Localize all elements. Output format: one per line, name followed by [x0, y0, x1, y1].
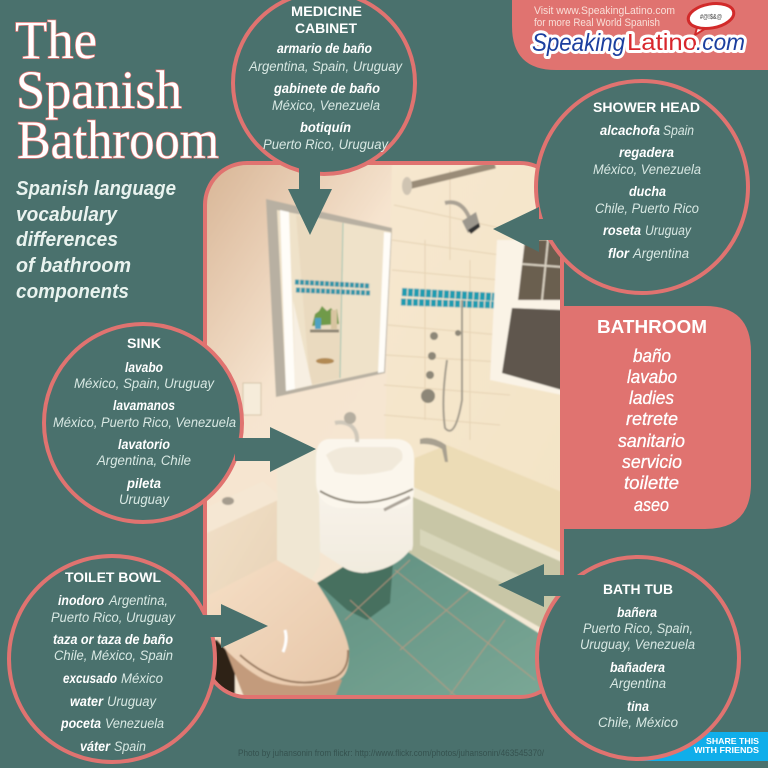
- circle: medicine cabinet: [233, 0, 415, 174]
- title: [15, 10, 219, 170]
- share banner: [640, 732, 768, 761]
- terms: shower head: México, Venezuela: [593, 162, 701, 177]
- word list: bathroom terms: retrete: [626, 408, 678, 429]
- circle: shower head: [536, 81, 748, 293]
- subtitle: differences: [16, 229, 118, 251]
- terms: bath tub: Puerto Rico, Spain,: [583, 621, 693, 636]
- promo text: for more Real World Spanish: [534, 17, 660, 29]
- heading: medicine cabinet: [291, 4, 362, 36]
- subtitle: of bathroom: [16, 255, 131, 277]
- share text: [694, 736, 759, 755]
- terms: bath tub: bañadera: [610, 660, 665, 675]
- title: Bathroom: [17, 110, 219, 170]
- circle: bath tub: [537, 557, 739, 759]
- word list: bathroom terms: ladies: [629, 387, 674, 408]
- terms: toilet bowl: [51, 593, 176, 754]
- terms: sink: México, Spain, Uruguay: [74, 376, 215, 391]
- share text: SHARE THIS: [706, 736, 759, 746]
- word list: bathroom terms: baño: [633, 345, 671, 366]
- terms: shower head: alcachofa: [600, 123, 660, 138]
- panel: sink: [44, 324, 316, 522]
- panel: shower head: [493, 81, 748, 293]
- title: Spanish: [16, 60, 182, 120]
- subtitle: Spanish language: [16, 178, 176, 200]
- terms: medicine cabinet: gabinete de baño: [273, 81, 380, 96]
- terms: toilet bowl: váter: [80, 739, 111, 754]
- promo text: Visit www.SpeakingLatino.com: [534, 5, 675, 17]
- terms: medicine cabinet: Puerto Rico, Uruguay: [263, 137, 389, 152]
- logo: SpeakingLatino.com: [532, 0, 745, 57]
- terms: toilet bowl: Argentina,: [108, 593, 168, 608]
- heading: bath tub: BATH TUB: [603, 582, 673, 597]
- heading: bathroom: BATHROOM: [597, 317, 707, 337]
- heading: toilet bowl: TOILET BOWL: [65, 570, 161, 585]
- word list: bathroom terms: lavabo: [627, 366, 677, 387]
- terms: bath tub: Chile, México: [598, 715, 678, 730]
- subtitle: components: [16, 281, 129, 303]
- title: The: [15, 10, 97, 70]
- logo: SpeakingLatino.com: #@!$&@: [700, 14, 722, 21]
- terms: bath tub: Argentina: [609, 676, 666, 691]
- circle: sink: [44, 324, 242, 522]
- terms: toilet bowl: excusado: [63, 671, 117, 686]
- terms: toilet bowl: Puerto Rico, Uruguay: [51, 610, 176, 625]
- terms: toilet bowl: Venezuela: [105, 716, 164, 731]
- heading: sink: SINK: [127, 336, 161, 351]
- heading: shower head: SHOWER HEAD: [593, 100, 700, 115]
- terms: toilet bowl: taza or taza de baño: [53, 632, 173, 647]
- terms: toilet bowl: water: [70, 694, 104, 709]
- terms: bath tub: Uruguay, Venezuela: [580, 637, 695, 652]
- arrow: to sink: [235, 427, 316, 472]
- terms: sink: Argentina, Chile: [96, 453, 191, 468]
- terms: sink: Uruguay: [119, 492, 170, 507]
- terms: medicine cabinet: armario de baño: [277, 41, 372, 56]
- arrow: to medicine cabinet: [288, 165, 332, 235]
- terms: shower head: Uruguay: [645, 223, 692, 238]
- subtitle: [16, 178, 176, 303]
- terms: shower head: Spain: [663, 123, 694, 138]
- word list: bathroom terms: aseo: [634, 494, 669, 515]
- panel: toilet bowl: [9, 556, 268, 762]
- terms: sink: lavatorio: [118, 437, 170, 452]
- arrow: to bath tub: [498, 564, 585, 607]
- terms: toilet bowl: Spain: [114, 739, 146, 754]
- terms: shower head: Argentina: [632, 246, 689, 261]
- terms: sink: México, Puerto Rico, Venezuela: [53, 415, 236, 430]
- terms: shower head: regadera: [619, 145, 674, 160]
- logo: SpeakingLatino.com: Latino: [627, 29, 697, 55]
- terms: toilet bowl: Chile, México, Spain: [54, 648, 173, 663]
- terms: medicine cabinet: México, Venezuela: [272, 98, 380, 113]
- terms: sink: [53, 360, 236, 507]
- circle: toilet bowl: [9, 556, 215, 762]
- terms: shower head: roseta: [603, 223, 641, 238]
- word list: bathroom terms: toilette: [624, 472, 679, 493]
- terms: sink: lavabo: [125, 360, 163, 375]
- terms: sink: lavamanos: [113, 398, 175, 413]
- arrow: to toilet: [195, 604, 268, 648]
- photo border: [205, 163, 562, 697]
- word list: bathroom terms: [618, 345, 685, 515]
- terms: toilet bowl: poceta: [60, 716, 101, 731]
- terms: toilet bowl: inodoro: [58, 593, 104, 608]
- terms: shower head: ducha: [629, 184, 666, 199]
- terms: bath tub: tina: [627, 699, 649, 714]
- terms: medicine cabinet: [248, 41, 403, 152]
- terms: shower head: Chile, Puerto Rico: [595, 201, 699, 216]
- panel: website promo: [512, 0, 768, 70]
- terms: bath tub: [580, 605, 695, 730]
- terms: toilet bowl: Uruguay: [107, 694, 157, 709]
- panel: bathroom synonyms: [560, 306, 751, 529]
- photo credit: Photo by juhansonin from flickr: http://www.flickr.com/photos/juhansonin/463545370/: [238, 748, 544, 758]
- panel: bath tub: [498, 557, 739, 759]
- heading: medicine cabinet: CABINET: [295, 21, 358, 36]
- terms: toilet bowl: México: [121, 671, 163, 686]
- terms: sink: pileta: [126, 476, 161, 491]
- word list: bathroom terms: sanitario: [618, 430, 685, 451]
- subtitle: vocabulary: [16, 204, 118, 226]
- terms: shower head: [593, 123, 701, 261]
- word list: bathroom terms: servicio: [622, 451, 682, 472]
- arrow: to shower head: [493, 207, 570, 252]
- logo: SpeakingLatino.com: Speaking: [532, 29, 625, 57]
- terms: shower head: flor: [608, 246, 630, 261]
- bathroom photo: [205, 163, 562, 700]
- terms: bath tub: bañera: [617, 605, 657, 620]
- promo text: [534, 5, 675, 29]
- panel: medicine cabinet: [233, 0, 415, 235]
- heading: medicine cabinet: MEDICINE: [291, 4, 362, 19]
- terms: medicine cabinet: botiquín: [300, 120, 351, 135]
- share text: WITH FRIENDS: [694, 745, 759, 755]
- terms: medicine cabinet: Argentina, Spain, Uruguay: [248, 59, 403, 74]
- logo: SpeakingLatino.com: .com: [696, 29, 745, 55]
